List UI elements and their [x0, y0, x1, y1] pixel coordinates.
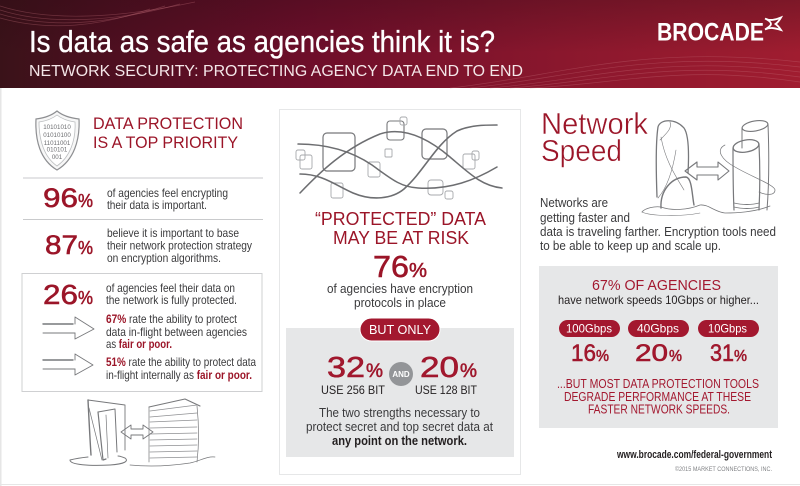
- stat: 96%: [43, 183, 228, 213]
- stat: 40Gbps 20%: [628, 320, 689, 367]
- stat: 10Gbps 31%: 10Gbps: [708, 322, 747, 336]
- stat: 100Gbps 16%: 100Gbps: [566, 322, 612, 336]
- icon: shield with binary: [36, 111, 79, 170]
- text: 67% in-flight between agencies: [106, 312, 247, 351]
- heading: 67% OF AGENCIES: [592, 277, 721, 294]
- text: two strengths: The two strengths necessary to: [319, 405, 480, 420]
- stat: 100Gbps 16%: [559, 320, 620, 367]
- stat: 96%: their data is important.: [107, 198, 207, 212]
- title: Is data as safe as agencies think it is?: [29, 24, 495, 59]
- heading: Speed: [541, 133, 622, 168]
- stat: 87%: believe it is important to base: [107, 226, 239, 240]
- heading: [93, 114, 243, 152]
- text: intro: Networks are: [540, 195, 608, 210]
- heading: MAY BE AT RISK: [333, 228, 469, 248]
- stat: 32%: [321, 352, 385, 397]
- text: encryption protocols: protocols in place: [354, 295, 446, 310]
- stat: 40Gbps 20%: 40Gbps: [637, 322, 679, 336]
- illustration: data waves and squares: [296, 117, 502, 199]
- text: two strengths: [306, 405, 493, 448]
- stat: 87%: %: [78, 238, 93, 258]
- badge: and: AND: [392, 370, 410, 379]
- text: intro: getting faster and: [540, 210, 630, 225]
- stat: 87%: 87: [45, 230, 78, 260]
- logo: Brocade: BROCADE: [657, 18, 764, 46]
- stat: 20%: [415, 352, 477, 397]
- text: encryption protocols: of agencies have encryption: [327, 281, 473, 296]
- stat: 96%: 96: [43, 183, 78, 213]
- text: two strengths: any point on the network.: [332, 433, 467, 448]
- stat: 26%: the network is fully protected.: [106, 293, 237, 307]
- copyright: ©2015 MARKET CONNECTIONS, INC.: [675, 466, 772, 473]
- stat: 20%: %: [460, 361, 477, 382]
- heading: [541, 106, 648, 168]
- badge: and: [389, 362, 413, 386]
- icon: shield with binary: 10101010: [43, 124, 71, 131]
- badge: but only: [360, 318, 440, 341]
- text: 51% in-flight internally: [106, 355, 256, 382]
- arrow: [43, 354, 93, 375]
- stat: 10Gbps 31%: 31: [710, 340, 734, 367]
- stat: 20%: 20: [420, 352, 459, 384]
- heading: [315, 209, 486, 248]
- text: 51% in-flight internally: in-flight internally as fair or poor.: [106, 368, 252, 382]
- stat: 26%: %: [78, 288, 93, 308]
- text: degrade performance: ...BUT MOST DATA PROTECTION TOOLS: [557, 376, 759, 391]
- stat: 10Gbps 31%: [698, 320, 759, 367]
- subtitle: NETWORK SECURITY: PROTECTING AGENCY DATA END TO END: [29, 63, 523, 80]
- icon: shield with binary: 010101: [47, 146, 68, 154]
- stat: 26%: of agencies feel their data on: [106, 281, 235, 295]
- stat: 20%: USE 128 BIT: [415, 385, 477, 397]
- icon: shield with binary: 11011001: [44, 140, 71, 147]
- stat: 100Gbps 16%: %: [596, 348, 609, 365]
- stat: 40Gbps 20%: 20: [635, 340, 668, 367]
- panel: data protection: [22, 111, 263, 466]
- panel: 67% of agencies: [539, 266, 778, 428]
- panel: but only: [286, 318, 514, 457]
- stat: 87%: their network protection strategy: [107, 238, 252, 252]
- text: encryption protocols: [327, 281, 473, 310]
- heading: DATA PROTECTION: [93, 114, 243, 133]
- stat: 96%: of agencies feel encrypting: [107, 186, 228, 200]
- header banner: [0, 0, 800, 88]
- text: 67% in-flight between agencies: as fair or poor.: [106, 337, 172, 351]
- text: degrade performance: [557, 376, 759, 416]
- text: two strengths: protect secret and top secret data at: [306, 419, 493, 434]
- panel: 26% box: [22, 274, 262, 392]
- stat: 87%: [45, 226, 252, 265]
- stat: 76%: [373, 249, 427, 284]
- stat: 26%: [43, 279, 237, 310]
- text: intro: [540, 195, 776, 253]
- stat: 10Gbps 31%: %: [734, 348, 747, 365]
- illustration: network speed towers: [642, 119, 775, 216]
- panel: protected data: [280, 110, 520, 474]
- stat: 100Gbps 16%: 16: [571, 340, 596, 367]
- text: 51% in-flight internally: 51% rate the ability to protect data: [106, 355, 256, 369]
- panel: network speed: [539, 106, 778, 428]
- stat: 32%: %: [366, 361, 383, 382]
- icon: shield with binary: 01010100: [43, 132, 71, 139]
- text: 67% in-flight between agencies: 67% rate the ability to protect: [106, 312, 238, 326]
- stat: 96%: %: [78, 191, 93, 211]
- icon: two buildings with arrow: [70, 399, 215, 466]
- stat: 32%: 32: [327, 352, 365, 384]
- stat: 26%: 26: [43, 279, 78, 310]
- badge: but only: BUT ONLY: [369, 323, 432, 337]
- heading: Network: [541, 106, 648, 141]
- subheading: have network speeds 10Gbps or higher...: [558, 293, 759, 307]
- heading: “PROTECTED” DATA: [315, 209, 486, 229]
- text: intro: to be able to keep up and scale up.: [540, 238, 721, 253]
- icon: shield with binary: 001: [52, 154, 63, 161]
- stat: 32%: USE 256 BIT: [321, 385, 385, 397]
- heading: IS A TOP PRIORITY: [93, 133, 238, 152]
- stat: 76%: %: [409, 260, 427, 282]
- stat: 87%: on encryption algorithms.: [107, 251, 221, 265]
- text: degrade performance: DEGRADE PERFORMANCE AT THESE: [564, 389, 751, 404]
- text: intro: data is traveling farther. Encryption tools need: [540, 224, 776, 239]
- stat: 40Gbps 20%: %: [669, 348, 682, 365]
- text: degrade performance: FASTER NETWORK SPEEDS.: [588, 402, 730, 416]
- stat: 76%: 76: [373, 249, 409, 284]
- arrow: [43, 317, 94, 339]
- text: 67% in-flight between agencies: data in-flight between agencies: [106, 325, 247, 339]
